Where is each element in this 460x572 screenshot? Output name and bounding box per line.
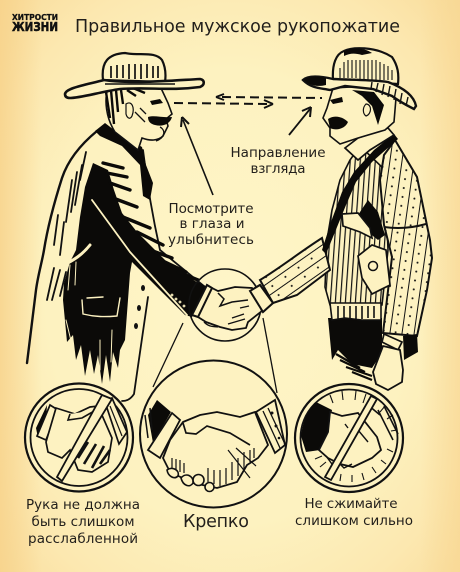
panel: firm grip bbox=[140, 360, 287, 508]
caption: too loose bbox=[26, 497, 140, 547]
left man: hat bbox=[65, 53, 204, 98]
right cuff bbox=[105, 398, 127, 444]
right man: trousers bbox=[328, 318, 382, 380]
left man: coat buttons bbox=[134, 285, 145, 329]
right cuff bbox=[256, 400, 285, 453]
caption: too loose: быть слишком bbox=[32, 514, 134, 530]
logo: Хитрости жизни: ХИТРОСТИ bbox=[12, 13, 58, 22]
right man: collar bbox=[345, 128, 394, 160]
right man: gun handle and holster bbox=[342, 200, 390, 294]
black sleeve bbox=[301, 402, 332, 452]
fingers bbox=[78, 442, 110, 468]
left man: vest and collar bbox=[95, 123, 153, 200]
label: look in the eyes and smile: Посмотрите bbox=[168, 201, 254, 217]
right man: black strap bbox=[322, 134, 398, 254]
label: look in the eyes and smile bbox=[168, 201, 254, 248]
arrow: gaze direction bbox=[289, 107, 311, 135]
left man: head bbox=[106, 86, 172, 150]
label: gaze direction bbox=[230, 145, 326, 177]
label: look in the eyes and smile: в глаза и bbox=[180, 216, 244, 232]
black sleeve bbox=[148, 400, 171, 443]
caption: not too strong: Не сжимайте bbox=[304, 496, 398, 512]
left man: highlight lines on coat bbox=[62, 200, 187, 370]
clasped hands bbox=[163, 412, 268, 488]
cuff, left hand bbox=[36, 405, 47, 438]
logo: Хитрости жизни bbox=[12, 13, 58, 34]
label: look in the eyes and smile: улыбнитесь bbox=[168, 232, 254, 248]
right man: head bbox=[323, 86, 396, 144]
left man bbox=[27, 53, 208, 401]
right man: far arm and sleeve bbox=[250, 238, 330, 312]
left cuff bbox=[148, 413, 180, 458]
caption: too loose: расслабленной bbox=[28, 531, 138, 547]
right man: shirt torso bbox=[325, 146, 388, 305]
label: gaze direction: взгляда bbox=[250, 161, 306, 177]
label: gaze direction: Направление bbox=[230, 145, 326, 161]
right man: waistband bbox=[330, 303, 381, 320]
crushing hands bbox=[319, 412, 381, 467]
finger hatching bbox=[172, 448, 256, 486]
left man: black coat shading bbox=[63, 163, 208, 384]
handshake in small circle bbox=[189, 269, 273, 341]
caption: too loose: Рука не должна bbox=[26, 497, 140, 513]
connector lines to detail circles bbox=[153, 318, 277, 393]
panel: too loose grip bbox=[25, 384, 133, 492]
arrow: look in the eyes bbox=[181, 117, 213, 195]
right man bbox=[250, 48, 432, 390]
radial ticks bbox=[315, 391, 397, 482]
right man: arm band bbox=[384, 224, 426, 228]
title: Правильное мужское рукопожатие bbox=[75, 17, 400, 37]
left man: coat outline bbox=[27, 131, 205, 401]
caption: not too strong bbox=[295, 496, 413, 529]
right man: cuff and hand bbox=[373, 334, 418, 390]
caption: not too strong: слишком сильно bbox=[295, 513, 413, 529]
right cuff bbox=[368, 405, 398, 440]
panel: too strong grip bbox=[295, 384, 403, 492]
slash bbox=[325, 396, 377, 480]
caption: firm: Крепко bbox=[183, 512, 249, 532]
left man: shading stripes on sleeve bbox=[103, 163, 198, 280]
eye-line dashed arrows bbox=[174, 94, 322, 108]
right man: near arm and shoulder bbox=[380, 140, 432, 336]
logo: Хитрости жизни: ЖИЗНИ bbox=[12, 20, 58, 34]
slash bbox=[57, 395, 112, 481]
right man: hat bbox=[303, 48, 416, 109]
